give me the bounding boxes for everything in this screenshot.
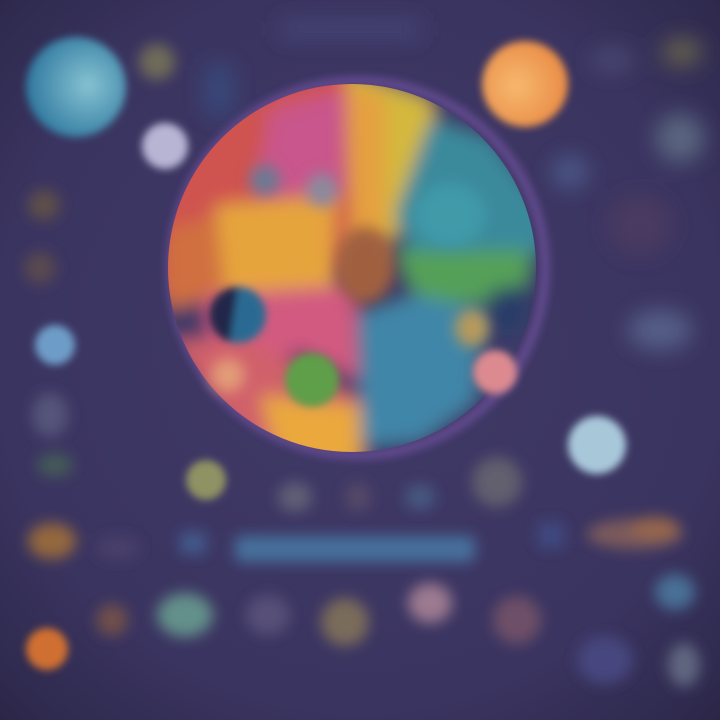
planet: small olive top left bbox=[139, 44, 175, 80]
row of small icons under the circle bbox=[278, 457, 522, 512]
planet: yellow-green small bbox=[186, 460, 226, 500]
inner green planet bbox=[285, 353, 339, 407]
blurred title bar bbox=[235, 536, 475, 562]
purple ring bbox=[171, 81, 545, 455]
orange label left bbox=[28, 523, 140, 560]
bar side marks bbox=[180, 522, 564, 554]
inner peach spot bbox=[211, 358, 245, 392]
planet: orange bottom left bbox=[26, 628, 68, 670]
colour wedges bbox=[168, 84, 536, 452]
bottom row icons bbox=[96, 574, 700, 687]
inner dark planet bbox=[209, 287, 266, 343]
left column icons bbox=[24, 190, 73, 477]
main circle chart bbox=[163, 73, 553, 463]
planet: blue top left bbox=[26, 37, 126, 137]
planet: orange top right bbox=[482, 41, 568, 127]
top streak bbox=[205, 20, 420, 115]
planet: blue left bbox=[35, 325, 75, 365]
right column icons bbox=[552, 38, 704, 350]
orange label right bbox=[587, 517, 683, 549]
planet: pale moon bbox=[142, 123, 188, 169]
planet: pale blue right bbox=[568, 416, 626, 474]
inner pink planet bbox=[473, 350, 517, 394]
wedge details bbox=[250, 165, 489, 347]
